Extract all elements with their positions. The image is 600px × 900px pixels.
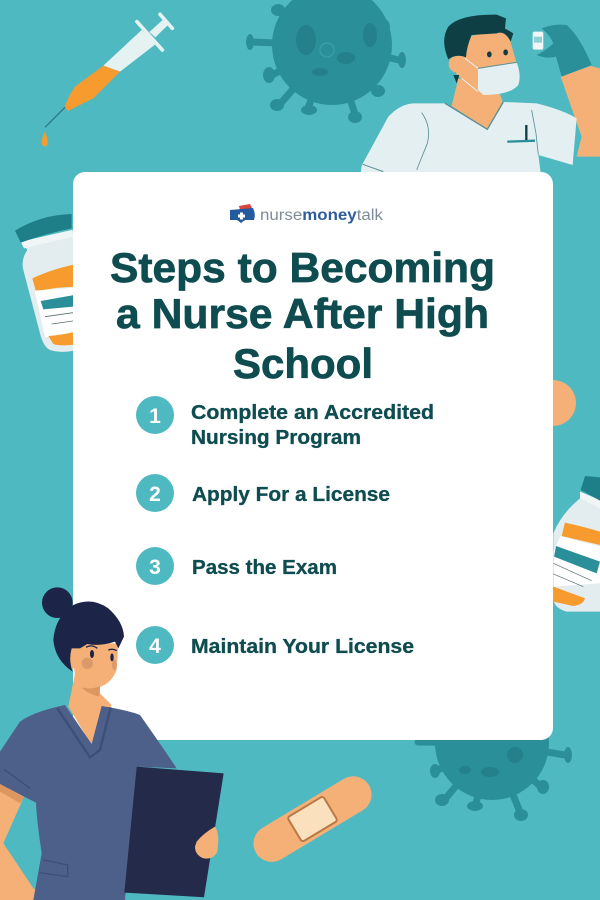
step 2: Apply For a License [192,484,390,506]
icon: medicine bottle right [553,476,600,612]
icon: logo mark [230,204,255,223]
shirt [360,102,577,180]
title: School [233,340,373,387]
figure: female nurse [0,587,224,900]
icon: bandage bottom [247,769,378,869]
clipboard [124,767,224,897]
shirt [0,705,177,900]
vial [533,32,543,50]
eyes [90,650,94,658]
step 3 [136,547,337,585]
step 1 [136,396,434,449]
neck [68,673,112,745]
step 1: 1 [149,405,161,428]
title: Steps to Becoming [110,244,495,291]
arm [0,783,57,900]
icon: medicine bottle left [15,214,87,352]
bun [42,587,73,618]
step 2: 2 [149,483,161,506]
step 1: Complete an Accredited [191,402,434,424]
neck [452,78,503,129]
title [110,244,495,387]
sleeve cuff [0,784,24,803]
icon: virus bottom [418,686,572,821]
step 1: Nursing Program [191,427,361,449]
face [456,28,517,95]
figure: male nurse [360,15,600,180]
arm [561,66,600,157]
hair [444,15,513,59]
icon: virus top [246,0,406,123]
panel: white card [73,172,553,740]
mask [478,62,520,95]
hand [195,827,218,859]
logo [230,204,383,224]
icon: bandage right [530,380,576,426]
logo text: nursemoney talk [260,207,383,224]
step 4: Maintain Your License [191,636,414,658]
eyes [487,51,492,57]
step 4: 4 [149,635,161,658]
hair [53,602,124,672]
step 2 [136,474,390,512]
icon: syringe [42,14,172,146]
step 3: Pass the Exam [192,557,337,579]
step 4 [136,626,414,664]
step 3: 3 [149,556,161,579]
face [71,643,118,688]
title: a Nurse After High [116,290,489,337]
glove [537,25,592,77]
